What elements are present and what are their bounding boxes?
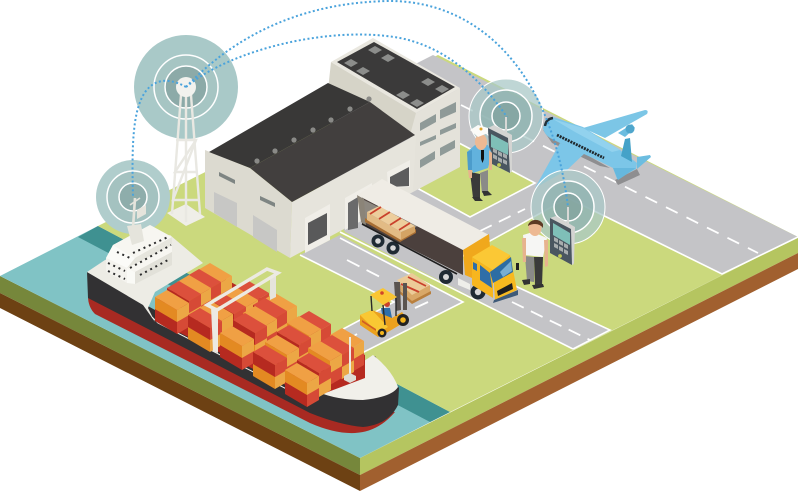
officer head [475, 134, 487, 150]
signal circle: officer device [469, 79, 543, 153]
green patch behind officer [417, 133, 535, 217]
road network [300, 55, 798, 353]
containers [155, 263, 365, 407]
officer with handheld [467, 117, 512, 201]
forklift [360, 273, 431, 338]
fuselage [543, 117, 637, 179]
mast [394, 282, 407, 311]
pallet load [397, 273, 431, 304]
far wing [583, 110, 648, 138]
signal circle: tower [134, 35, 238, 139]
signal circle: man device [531, 170, 605, 244]
ship [87, 198, 399, 433]
forklift wheels [378, 314, 409, 338]
red lower hull [88, 296, 395, 433]
officer torso [467, 145, 492, 173]
engine [618, 124, 635, 137]
man head [528, 220, 542, 236]
canopy [370, 288, 397, 325]
soil base block [0, 237, 798, 491]
dotted signal links [133, 1, 568, 207]
cab [458, 245, 519, 303]
gantry crane [207, 269, 278, 353]
cargo boxes [365, 206, 416, 242]
cabin windows [557, 135, 604, 158]
truck wheels [372, 234, 486, 300]
man device [550, 207, 575, 265]
fin [621, 138, 632, 162]
tall block [328, 38, 460, 192]
water channel [0, 226, 450, 458]
man torso [523, 232, 547, 257]
radio tower [167, 77, 205, 226]
bow mast [344, 337, 356, 383]
truck [357, 179, 519, 303]
gable end wall [205, 150, 292, 258]
plane shadow on runway [543, 130, 640, 185]
warehouse roof [209, 83, 415, 202]
driver [381, 301, 392, 320]
bow deck [318, 355, 398, 400]
warehouse building [205, 38, 460, 258]
signal circle: ship [96, 160, 170, 234]
stern deck [87, 235, 203, 322]
man legs [525, 256, 534, 282]
tail plane [637, 155, 651, 169]
near wing [535, 143, 585, 188]
superstructure [106, 198, 172, 284]
trailer [362, 197, 463, 275]
man with handheld [522, 207, 575, 289]
container stack underlay [157, 268, 365, 396]
green land [98, 55, 798, 412]
long wall with docks [290, 135, 416, 258]
airplane [535, 110, 651, 188]
ship mast [127, 198, 146, 245]
body [360, 310, 408, 337]
black hull [87, 272, 399, 427]
officer legs [470, 172, 480, 198]
officer device [488, 117, 512, 173]
cab back panel [463, 234, 490, 278]
